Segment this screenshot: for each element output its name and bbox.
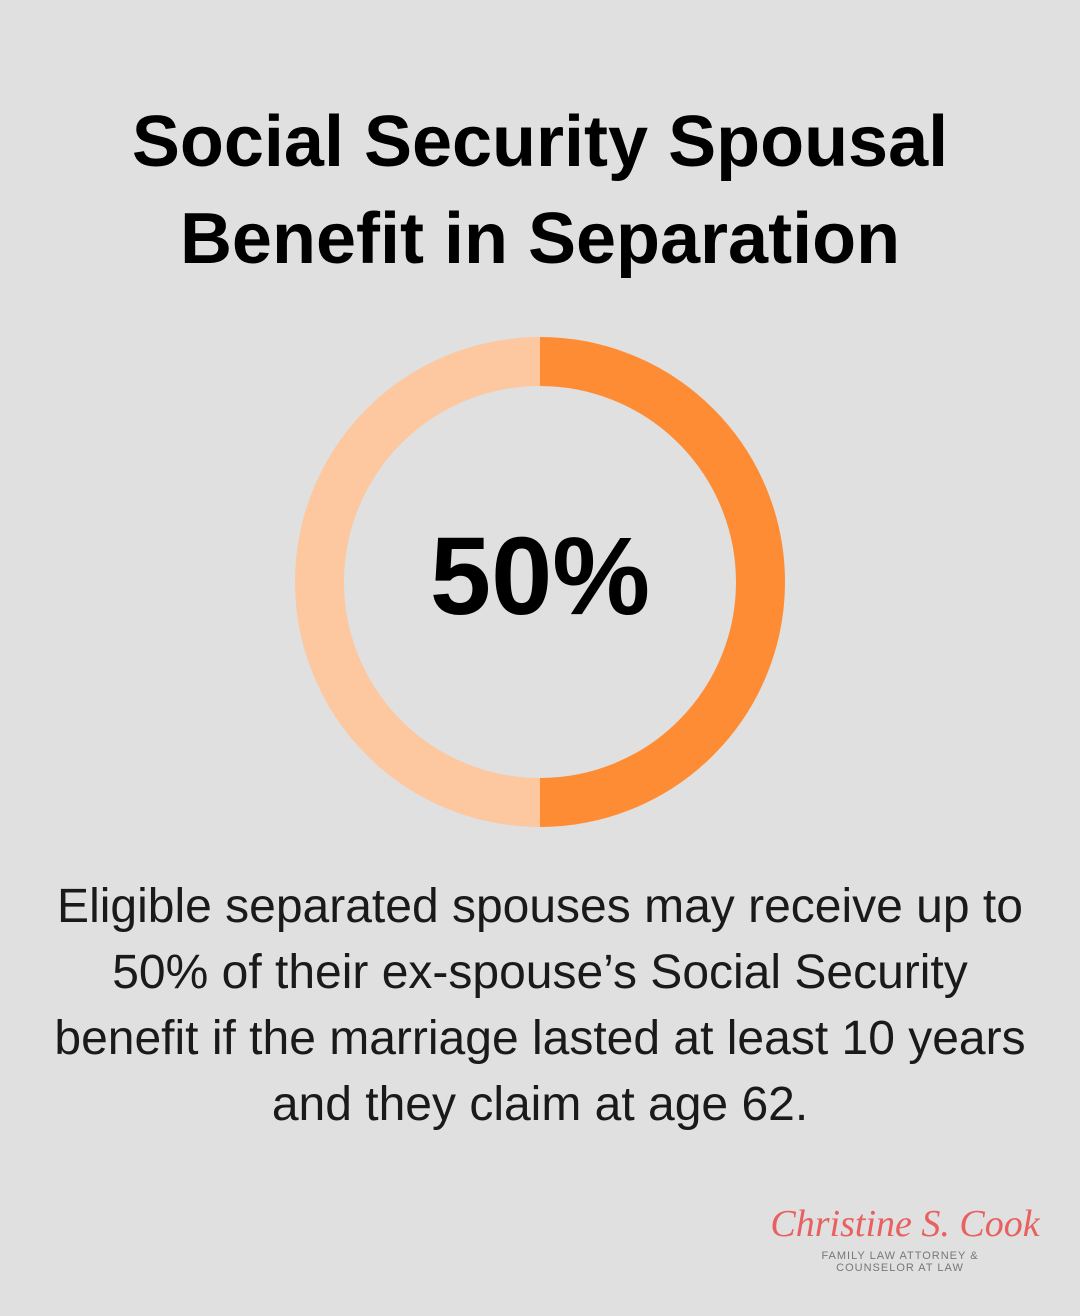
donut value arc 50% <box>540 362 760 802</box>
title: Benefit in Separation <box>180 199 900 279</box>
logo: Christine S. Cook <box>770 1203 1040 1245</box>
title: Social Security Spousal <box>132 102 948 182</box>
description text: 50% of their ex-spouse’s Social Security <box>112 946 968 999</box>
donut background ring <box>320 362 760 802</box>
title <box>132 102 948 279</box>
description text: and they claim at age 62. <box>272 1078 808 1131</box>
logo: COUNSELOR AT LAW <box>836 1262 964 1274</box>
description text: Eligible separated spouses may receive up to <box>57 880 1023 933</box>
description text: benefit if the marriage lasted at least 10 years <box>54 1012 1026 1065</box>
center value: 50% <box>430 515 650 638</box>
description text <box>54 880 1026 1131</box>
logo <box>770 1203 1040 1274</box>
logo: FAMILY LAW ATTORNEY & <box>821 1250 979 1262</box>
